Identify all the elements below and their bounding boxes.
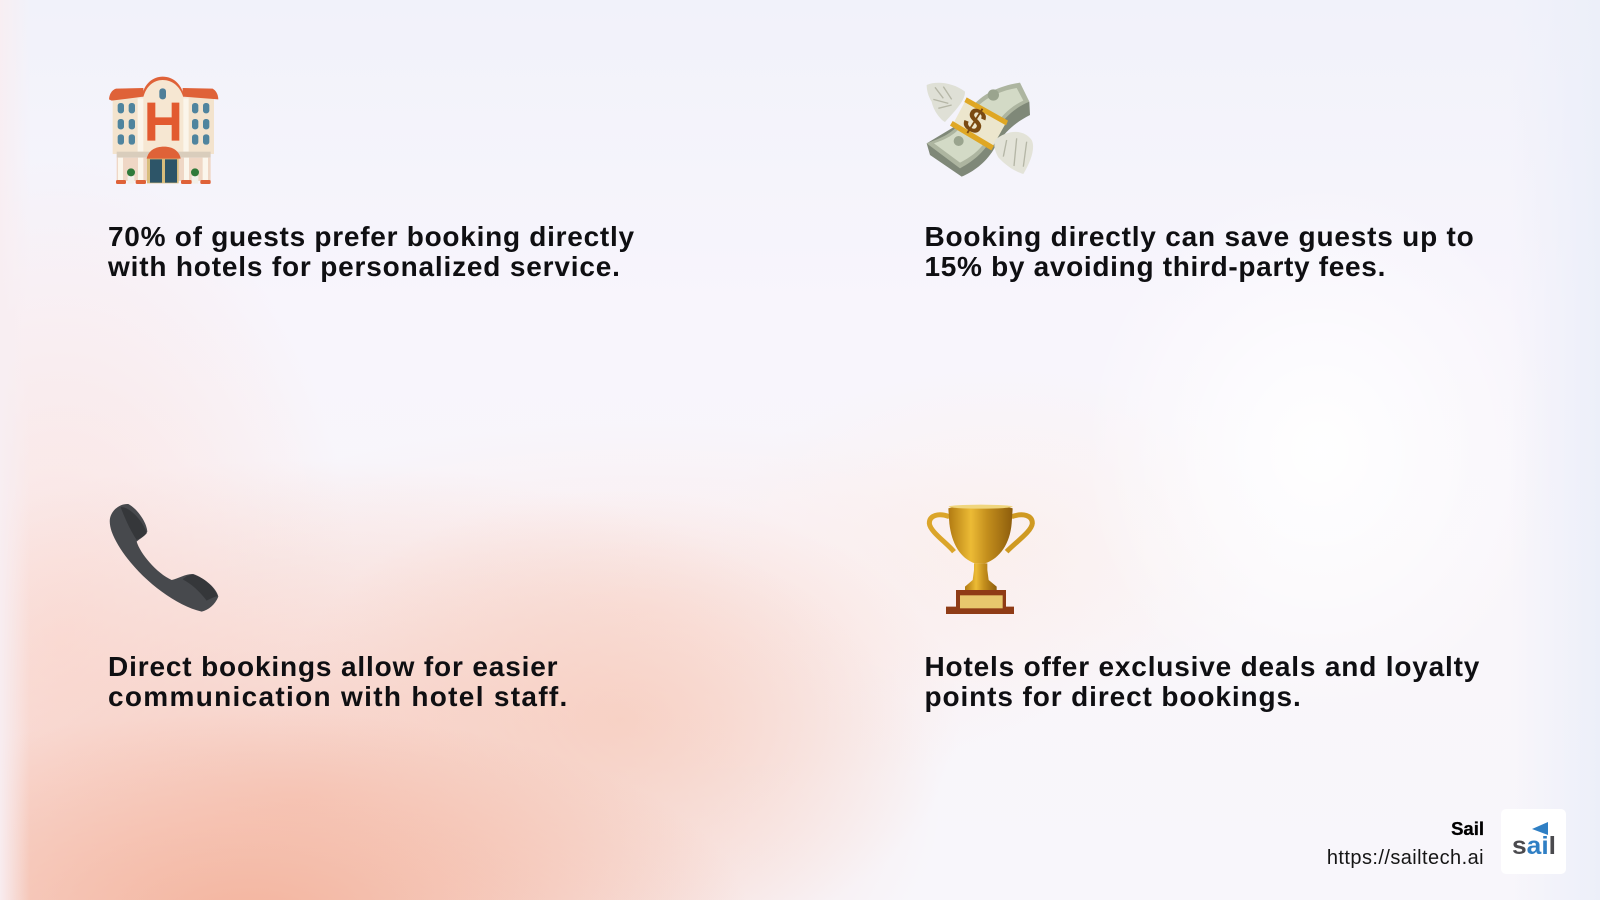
icon: hotel <box>109 76 218 184</box>
logo mark: sail <box>1512 832 1556 860</box>
icon: money with wings: $ <box>956 99 993 143</box>
brand footer <box>1327 809 1566 874</box>
caption: guest preference: 70% of guests prefer booking directly <box>108 221 635 252</box>
brand url: https://sailtech.ai <box>1327 847 1484 869</box>
panel: communication <box>108 504 569 712</box>
caption: guest preference: with hotels for personalized service. <box>108 251 621 282</box>
caption: loyalty deals: Hotels offer exclusive deals and loyalty <box>924 651 1480 682</box>
caption: guest preference <box>108 221 635 282</box>
panel: savings <box>924 82 1475 282</box>
panel: guest preference <box>108 76 635 282</box>
panel: loyalty deals <box>924 504 1480 712</box>
icon: trophy <box>926 504 1035 614</box>
brand name: Sail <box>1451 818 1484 839</box>
caption: loyalty deals <box>924 651 1480 712</box>
caption: communication <box>108 651 569 712</box>
caption: communication: communication with hotel staff. <box>108 681 569 712</box>
logo card <box>1501 809 1566 874</box>
caption: communication: Direct bookings allow for easier <box>108 651 558 682</box>
caption: loyalty deals: points for direct bookings. <box>924 681 1302 712</box>
icon: telephone receiver <box>110 504 218 612</box>
caption: savings: Booking directly can save guests up to <box>924 221 1475 252</box>
icon: money with wings <box>926 82 1033 177</box>
caption: savings: 15% by avoiding third-party fees. <box>924 251 1386 282</box>
caption: savings <box>924 221 1475 282</box>
